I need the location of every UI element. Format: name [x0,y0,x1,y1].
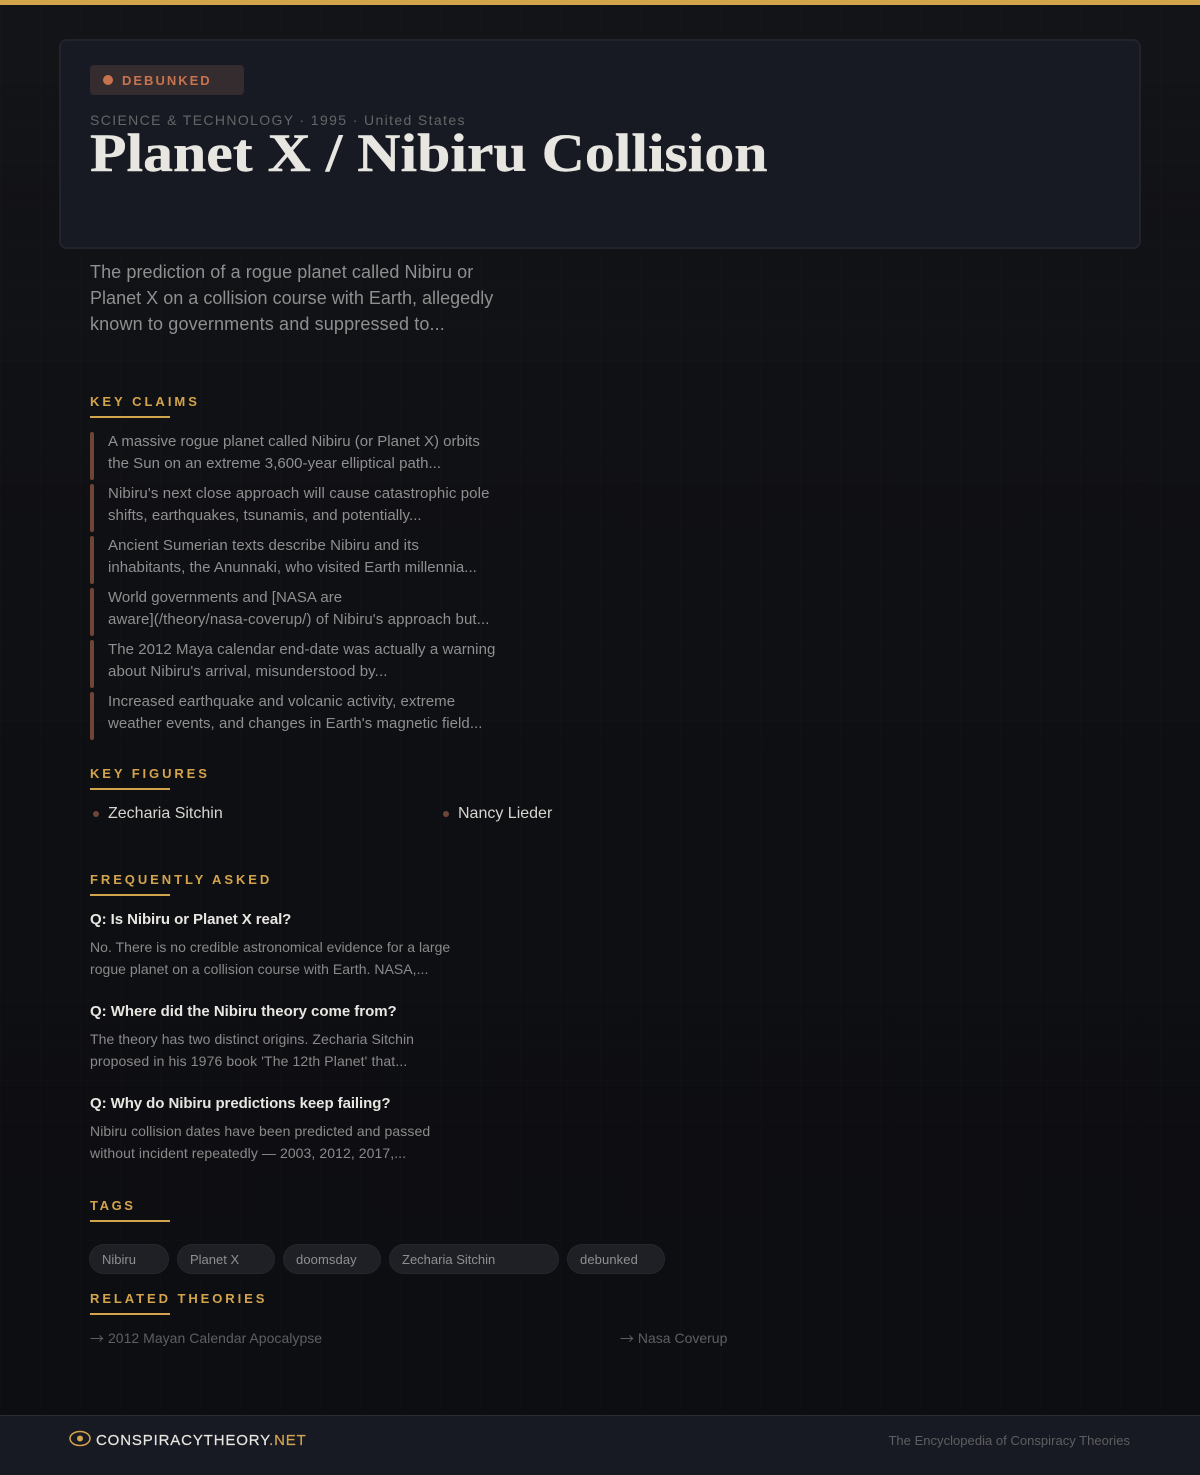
title: Planet X / Nibiru Collision [90,123,768,183]
tag: Nibiru: Nibiru [102,1252,136,1267]
faq 3: Q: Why do Nibiru predictions keep failing? [90,1095,390,1112]
related link: 2012 Mayan Calendar Apocalypse: → 2012 Mayan Calendar Apocalypse [90,1329,322,1349]
claim 1: the Sun on an extreme 3,600-year elliptical path... [108,455,441,472]
heading: frequently asked: FREQUENTLY ASKED [90,872,272,887]
claim 4: World governments and [NASA are [108,589,342,606]
claim 3 [90,536,477,584]
faq 2: The theory has two distinct origins. Zecharia Sitchin [90,1031,414,1047]
claim 4 [90,588,490,636]
icon: eye logo [69,1430,91,1446]
faq 3 [90,1095,430,1161]
footer tagline: The Encyclopedia of Conspiracy Theories [888,1433,1130,1448]
tag: doomsday: doomsday [296,1252,357,1267]
faq 2: proposed in his 1976 book 'The 12th Planet' that... [90,1053,407,1069]
faq 2: Q: Where did the Nibiru theory come from? [90,1003,397,1020]
tag: Nibiru [89,1244,169,1274]
logo wordmark: CONSPIRACYTHEORY.NET [96,1432,307,1449]
figure: Zecharia Sitchin: Zecharia Sitchin [108,805,223,822]
badge label: DEBUNKED [122,73,212,88]
tag: debunked [567,1244,665,1274]
tag: Planet X: Planet X [190,1252,239,1267]
top accent bar [0,0,1200,5]
tag: Planet X [177,1244,275,1274]
tag: doomsday [283,1244,381,1274]
claim 1 [90,432,480,480]
claim 2: Nibiru's next close approach will cause catastrophic pole [108,485,490,502]
faq 3: Nibiru collision dates have been predicted and passed [90,1123,430,1139]
faq 1: No. There is no credible astronomical evidence for a large [90,939,450,955]
heading: key figures: KEY FIGURES [90,766,210,781]
related link: Nasa Coverup: → Nasa Coverup [620,1329,727,1349]
panel: footer [0,1415,1200,1475]
intro text: The prediction of a rogue planet called Nibiru or [90,262,473,282]
tag: Zecharia Sitchin: Zecharia Sitchin [402,1252,495,1267]
claim 5: The 2012 Maya calendar end-date was actually a warning [108,641,495,658]
panel: header card [59,39,1141,249]
claim 4: aware](/theory/nasa-coverup/) of Nibiru's approach but... [108,611,490,628]
figure: Nancy Lieder: Nancy Lieder [458,805,552,822]
faq 1: Q: Is Nibiru or Planet X real? [90,911,291,928]
claim 3: Ancient Sumerian texts describe Nibiru and its [108,537,419,554]
claim 3: inhabitants, the Anunnaki, who visited Earth millennia... [108,559,477,576]
claim 6: weather events, and changes in Earth's magnetic field... [108,715,482,732]
intro text [90,262,494,334]
heading: related theories: RELATED THEORIES [90,1291,267,1306]
faq 1: rogue planet on a collision course with Earth. NASA,... [90,961,428,977]
tag: debunked: debunked [580,1252,638,1267]
faq 2 [90,1003,414,1069]
category and date line: SCIENCE & TECHNOLOGY · 1995 · United States [90,112,466,128]
intro text: known to governments and suppressed to... [90,314,445,334]
claim 6 [90,692,482,740]
claim 1: A massive rogue planet called Nibiru (or Planet X) orbits [108,433,480,450]
tag: Zecharia Sitchin [389,1244,559,1274]
intro text: Planet X on a collision course with Earth, allegedly [90,288,493,308]
claim 5 [90,640,495,688]
heading: key claims: KEY CLAIMS [90,394,200,409]
faq 3: without incident repeatedly — 2003, 2012, 2017,... [90,1145,406,1161]
panel: key claims list [90,432,495,740]
claim 6: Increased earthquake and volcanic activity, extreme [108,693,455,710]
claim 2: shifts, earthquakes, tsunamis, and potentially... [108,507,422,524]
icon: status dot [103,75,113,85]
claim 5: about Nibiru's arrival, misunderstood by... [108,663,388,680]
claim 2 [90,484,490,532]
faq 1 [90,911,450,977]
heading: tags: TAGS [90,1198,136,1213]
status badge: debunked [90,65,244,95]
